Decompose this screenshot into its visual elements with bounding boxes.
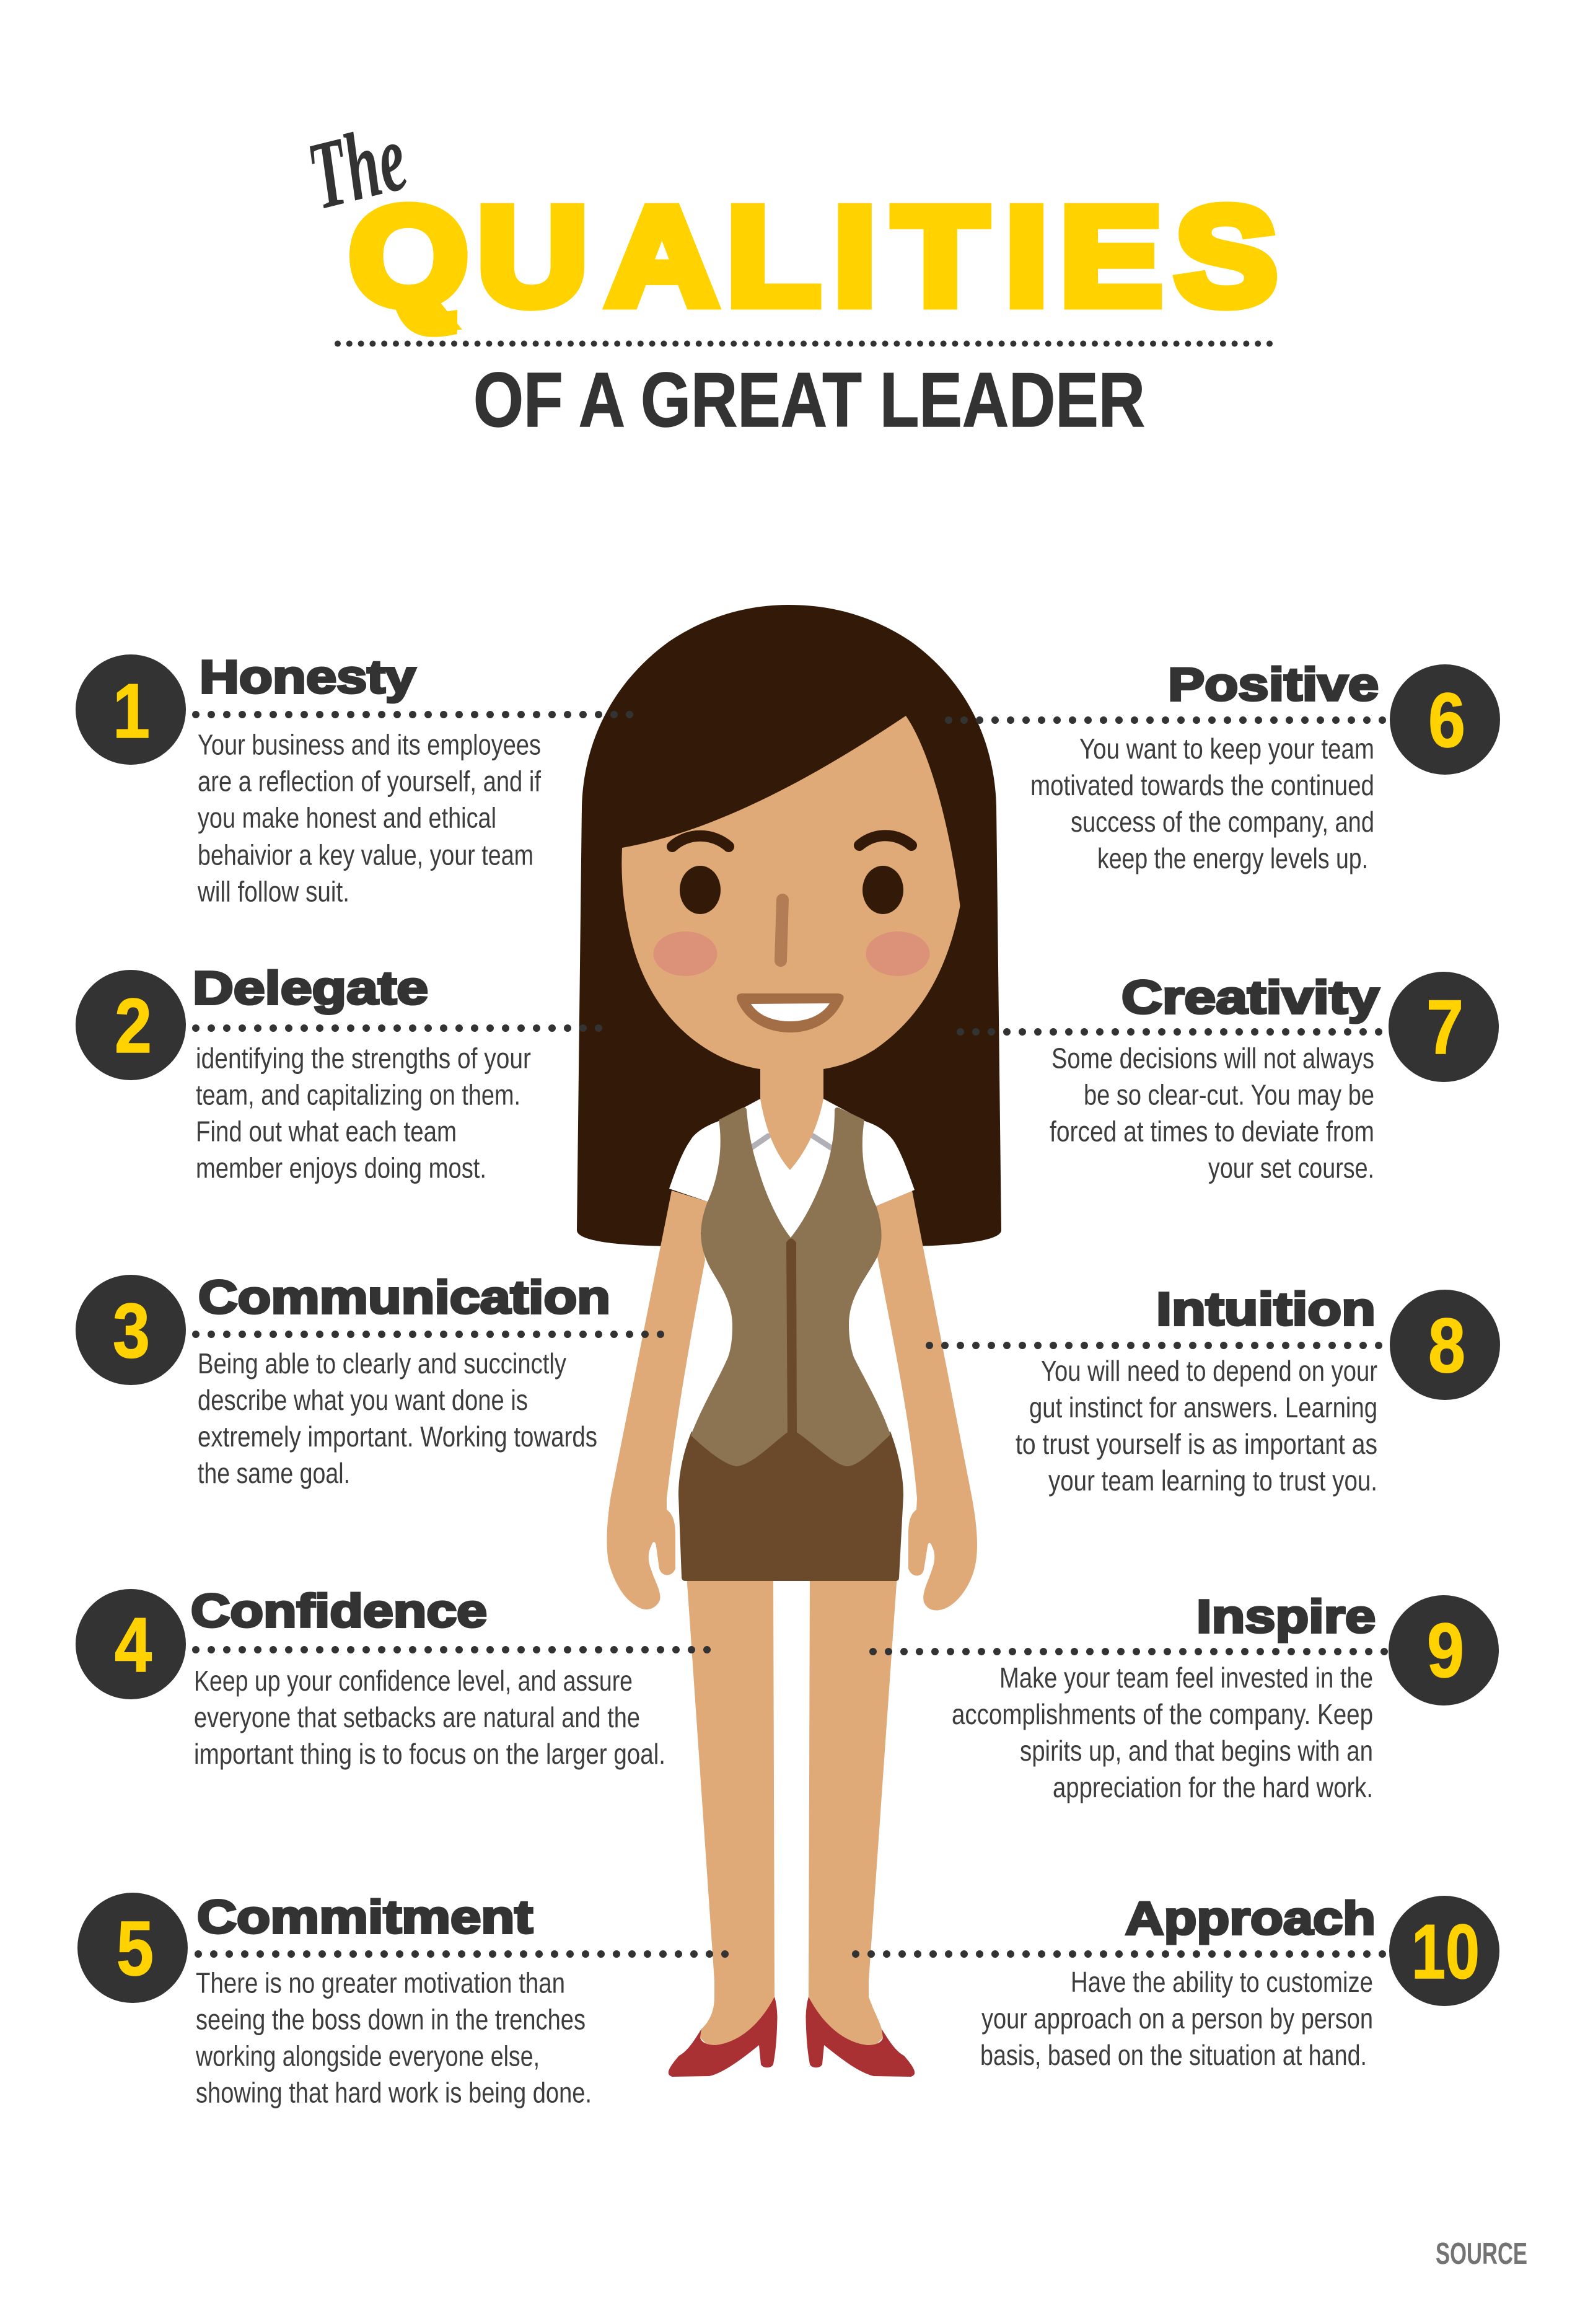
panel: 5 Commitment [77, 1891, 726, 2108]
subtitle: OF A GREAT LEADER [473, 358, 1145, 443]
cheeks [653, 931, 929, 976]
dotted connector [960, 1028, 1384, 1036]
teeth [751, 1003, 830, 1021]
description: member enjoys doing most. [196, 1151, 486, 1184]
panel: 4 Confidence [76, 1585, 708, 1770]
description [196, 1042, 531, 1184]
description [195, 1967, 592, 2108]
heading: Delegate [193, 962, 428, 1014]
description [980, 1966, 1373, 2071]
title [298, 103, 1277, 443]
description: behaivior a key value, your team [198, 839, 533, 871]
panel: 7 Creativity [960, 971, 1499, 1184]
collar buttons [748, 1136, 834, 1150]
hair [577, 605, 1001, 1246]
description [952, 1662, 1373, 1803]
number badge 7 [1389, 972, 1499, 1082]
number 1: 1 [113, 669, 150, 754]
description: forced at times to deviate from [1050, 1116, 1374, 1148]
description: Being able to clearly and succinctly [198, 1347, 566, 1380]
number 2: 2 [115, 984, 152, 1069]
panel: 10 Approach [856, 1892, 1499, 2071]
description: There is no greater motivation than [196, 1967, 565, 1999]
title dotted rule [338, 341, 1272, 347]
description: success of the company, and [1071, 806, 1374, 838]
description: describe what you want done is [198, 1384, 528, 1416]
illustration: woman leader [577, 605, 1001, 2077]
right shoe [805, 1997, 915, 2077]
number badge 6 [1390, 664, 1500, 775]
number 3: 3 [113, 1288, 150, 1374]
mouth [737, 993, 844, 1032]
description: spirits up, and that begins with an [1020, 1735, 1373, 1767]
title main word: QUALITIES: QUALITIES [349, 178, 1277, 335]
description [197, 729, 541, 907]
description: basis, based on the situation at hand. [980, 2039, 1367, 2071]
panel: 8 Intuition [929, 1283, 1500, 1497]
description [1050, 1042, 1374, 1184]
heading: Confidence [191, 1585, 487, 1637]
description: your approach on a person by person [981, 2002, 1373, 2035]
left leg [687, 1574, 775, 2045]
description: the same goal. [198, 1457, 350, 1489]
description: be so clear-cut. You may be [1084, 1078, 1374, 1111]
left arm [607, 1191, 708, 1609]
description: Keep up your confidence level, and assure [194, 1665, 633, 1697]
panel: 1 Honesty [76, 651, 630, 907]
description: to trust yourself is as important as [1016, 1428, 1377, 1460]
description: Have the ability to customize [1071, 1966, 1373, 1998]
source label: SOURCE [1436, 2237, 1527, 2271]
shirt [669, 1099, 915, 1246]
vest [691, 1107, 890, 1466]
dotted connector [196, 1331, 664, 1338]
number badge 4 [76, 1589, 186, 1699]
number badge 3 [76, 1275, 186, 1385]
description: working alongside everyone else, [195, 2040, 540, 2072]
number 6: 6 [1428, 678, 1465, 764]
left shoe [669, 1997, 777, 2077]
dotted connector [873, 1648, 1385, 1655]
nose [781, 900, 783, 961]
description [194, 1665, 665, 1770]
description: important thing is to focus on the larger goal. [194, 1738, 665, 1770]
description: will follow suit. [197, 875, 349, 907]
description: appreciation for the hard work. [1053, 1771, 1373, 1803]
dotted connector [856, 1950, 1384, 1958]
heading: Creativity [1121, 971, 1379, 1023]
description: extremely important. Working towards [198, 1420, 597, 1453]
face and neck [621, 716, 960, 1170]
number badge 2 [76, 970, 186, 1080]
skirt [678, 1432, 903, 1581]
description: you make honest and ethical [198, 802, 496, 834]
heading: Commitment [197, 1891, 533, 1943]
dotted connector [929, 1342, 1384, 1349]
heading: Honesty [200, 651, 416, 703]
number 5: 5 [116, 1906, 154, 1992]
description [1016, 1355, 1377, 1497]
description: You will need to depend on your [1041, 1355, 1377, 1387]
description: everyone that setbacks are natural and the [194, 1701, 640, 1733]
panel: 9 Inspire [873, 1590, 1499, 1803]
description: your set course. [1208, 1151, 1374, 1184]
heading: Inspire [1196, 1590, 1376, 1642]
eyebrows [672, 835, 911, 847]
description: your team learning to trust you. [1048, 1464, 1377, 1497]
description: keep the energy levels up. [1097, 842, 1368, 874]
number badge 5 [77, 1893, 188, 2003]
heading: Communication [198, 1271, 610, 1323]
number 9: 9 [1427, 1608, 1464, 1694]
dotted connector [196, 711, 630, 718]
description: seeing the boss down in the trenches [196, 2003, 586, 2035]
right leg [809, 1574, 897, 2045]
vest placket [786, 1238, 797, 1438]
description: showing that hard work is being done. [196, 2076, 592, 2108]
number 7: 7 [1426, 985, 1464, 1070]
title script word: The: The [298, 103, 416, 230]
description: are a reflection of yourself, and if [198, 765, 541, 797]
description: accomplishments of the company. Keep [952, 1698, 1373, 1730]
panel: 6 Positive [949, 658, 1500, 874]
number 10: 10 [1411, 1909, 1480, 1995]
description [1030, 733, 1374, 874]
number badge 1 [76, 654, 186, 765]
number 4: 4 [115, 1603, 152, 1688]
number badge 8 [1390, 1290, 1500, 1400]
dotted connector [196, 1024, 599, 1032]
panel: 2 Delegate [76, 962, 599, 1184]
Q tail [405, 301, 462, 330]
description: gut instinct for answers. Learning [1029, 1391, 1377, 1424]
heading: Approach [1125, 1892, 1376, 1944]
description: Make your team feel invested in the [999, 1662, 1373, 1694]
panel: 3 Communication [76, 1271, 664, 1489]
description: team, and capitalizing on them. [196, 1078, 520, 1111]
number badge 10 [1389, 1896, 1499, 2006]
number 8: 8 [1428, 1303, 1465, 1389]
dotted connector [198, 1950, 726, 1958]
heading: Intuition [1156, 1283, 1376, 1335]
heading: Positive [1168, 658, 1379, 710]
number badge 9 [1389, 1595, 1499, 1706]
description: identifying the strengths of your [196, 1042, 531, 1075]
description [198, 1347, 597, 1489]
dotted connector [949, 716, 1384, 724]
description: Find out what each team [196, 1116, 457, 1148]
description: motivated towards the continued [1030, 769, 1374, 801]
right arm [876, 1191, 977, 1610]
eyes [680, 866, 903, 914]
dotted connector [196, 1646, 708, 1653]
description: Your business and its employees [198, 729, 541, 761]
description: Some decisions will not always [1051, 1042, 1374, 1075]
description: You want to keep your team [1079, 733, 1374, 765]
